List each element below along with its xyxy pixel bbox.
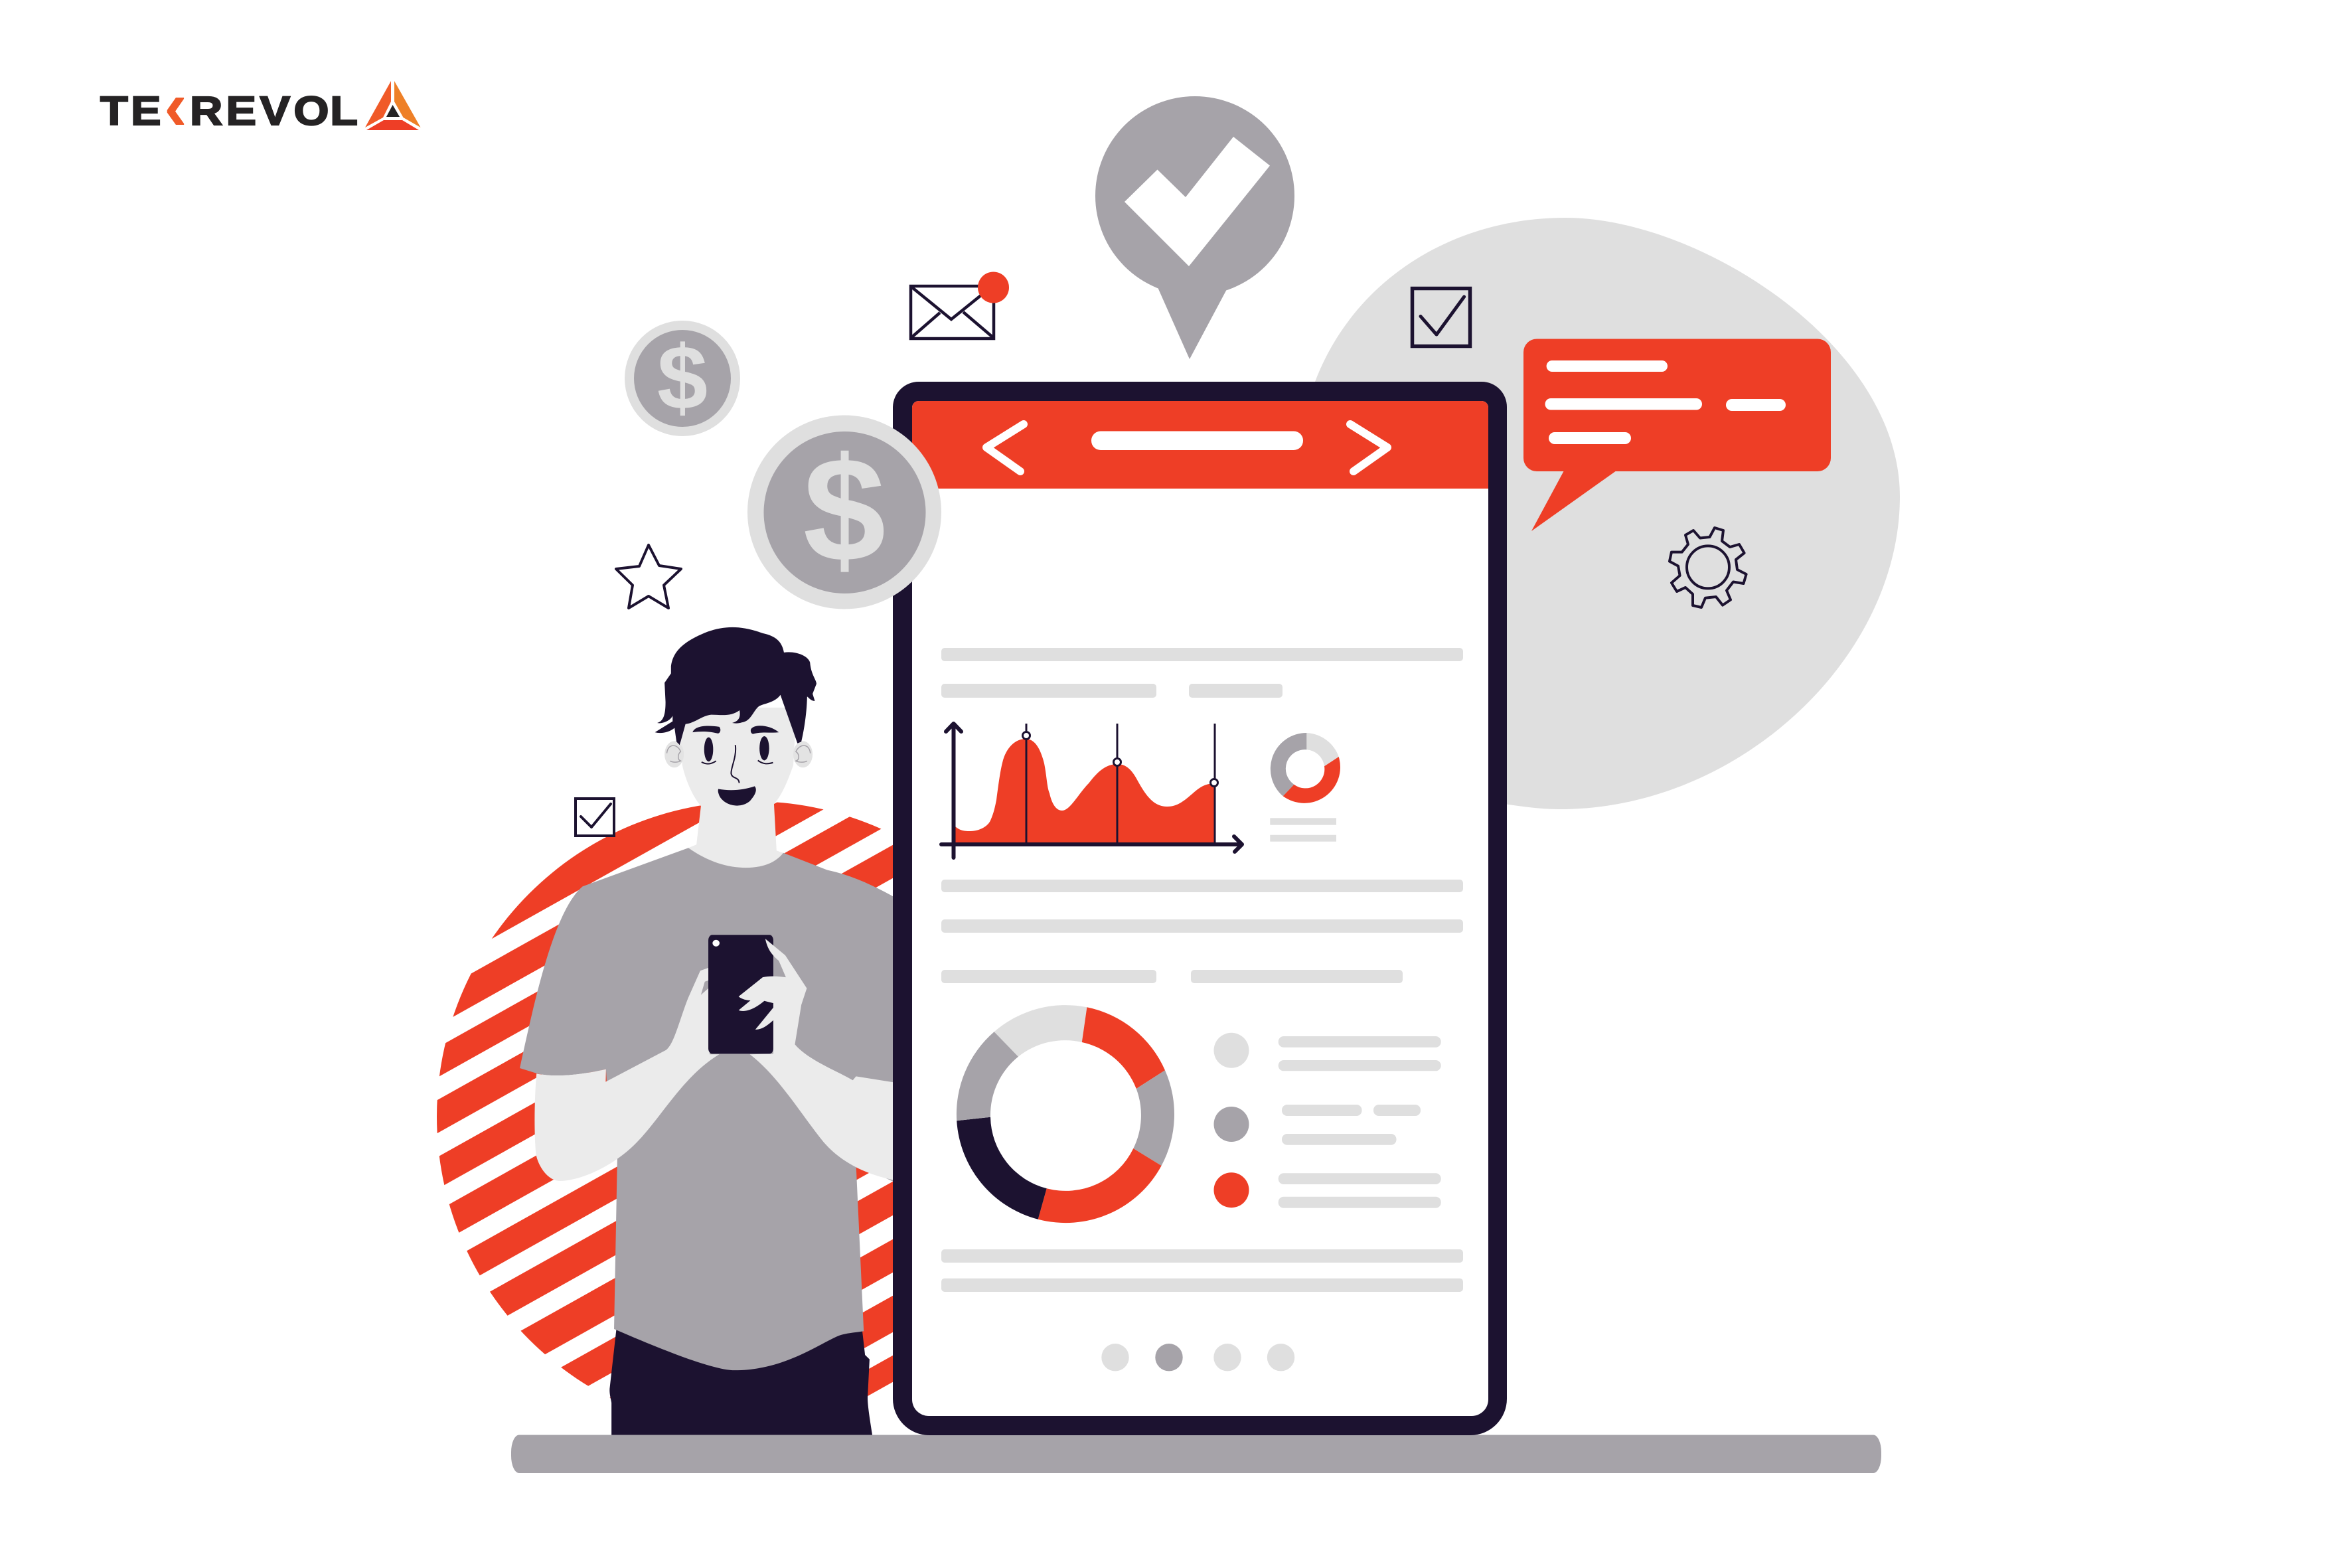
ears bbox=[664, 741, 813, 767]
phone frame bbox=[893, 382, 1507, 1435]
icon: small dollar coin bbox=[625, 321, 740, 436]
person holding a smartphone bbox=[520, 627, 898, 1438]
logo: TEKREVOL: REVOL bbox=[190, 88, 358, 133]
speech bubble bbox=[1523, 339, 1831, 531]
hair bbox=[655, 627, 817, 745]
icon: large dollar coin: $ bbox=[803, 427, 886, 593]
t-shirt bbox=[520, 848, 898, 1370]
face details bbox=[692, 726, 779, 806]
icon: small checkbox near person bbox=[576, 799, 614, 836]
right arm and hand bbox=[739, 939, 898, 1181]
small donut chart bbox=[1270, 733, 1340, 842]
ground bar bbox=[511, 1435, 1881, 1473]
icon: small dollar coin: $ bbox=[657, 327, 708, 429]
pagination dots bbox=[1101, 1344, 1294, 1371]
trousers bbox=[609, 1327, 873, 1438]
phone header bbox=[912, 401, 1488, 489]
striped circle bbox=[437, 802, 893, 1398]
phone mockup bbox=[893, 382, 1507, 1435]
icon: envelope with notification bbox=[911, 272, 1009, 339]
logo: TEKREVOL: TE bbox=[100, 88, 161, 133]
text placeholder bars bbox=[941, 648, 1463, 1292]
logo: TEKREVOL: ‹ bbox=[164, 67, 187, 145]
left arm bbox=[534, 967, 720, 1181]
icon: gear bbox=[1670, 528, 1747, 607]
large donut chart bbox=[957, 1005, 1174, 1223]
area chart bbox=[941, 724, 1242, 858]
smartphone in hand bbox=[708, 935, 773, 1054]
phone screen bbox=[912, 401, 1488, 1416]
donut legend bbox=[1213, 1033, 1441, 1208]
background blob bbox=[1311, 218, 1900, 809]
head and neck bbox=[679, 708, 797, 878]
logo: TEKREVOL bbox=[100, 67, 421, 145]
icon: checkbox on blob bbox=[1413, 288, 1470, 347]
icon: large dollar coin bbox=[747, 416, 941, 609]
icon: star bbox=[616, 545, 681, 608]
icon: location pin with check mark bbox=[1095, 96, 1294, 359]
